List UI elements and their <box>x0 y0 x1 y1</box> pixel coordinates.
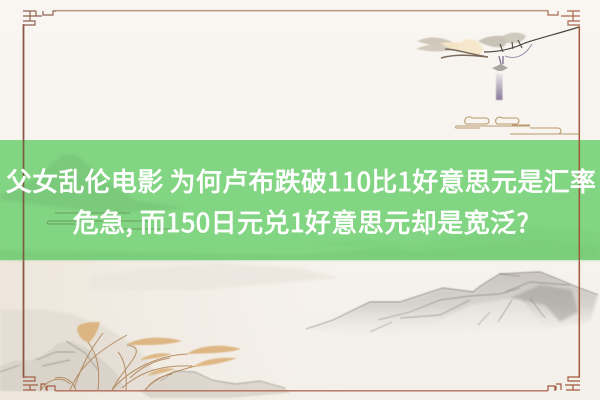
green title band <box>0 140 600 260</box>
corner ornament bottom right <box>548 377 580 391</box>
gold cloud ornament top right <box>456 117 579 134</box>
rocks bottom left <box>0 341 290 398</box>
title text <box>6 162 596 240</box>
magnolia branch with tassel <box>416 27 579 100</box>
title text: 父女乱伦电影 为何卢布跌破110比1好意思元是汇率 <box>6 162 596 199</box>
corner ornament bottom left <box>23 377 55 391</box>
ink mountain right <box>306 272 598 335</box>
corner ornament top left <box>23 11 56 25</box>
title text: 危急, 而150日元兑1好意思元却是宽泛? <box>73 203 529 240</box>
golden reeds <box>40 322 241 391</box>
corner ornament top right <box>547 11 580 25</box>
